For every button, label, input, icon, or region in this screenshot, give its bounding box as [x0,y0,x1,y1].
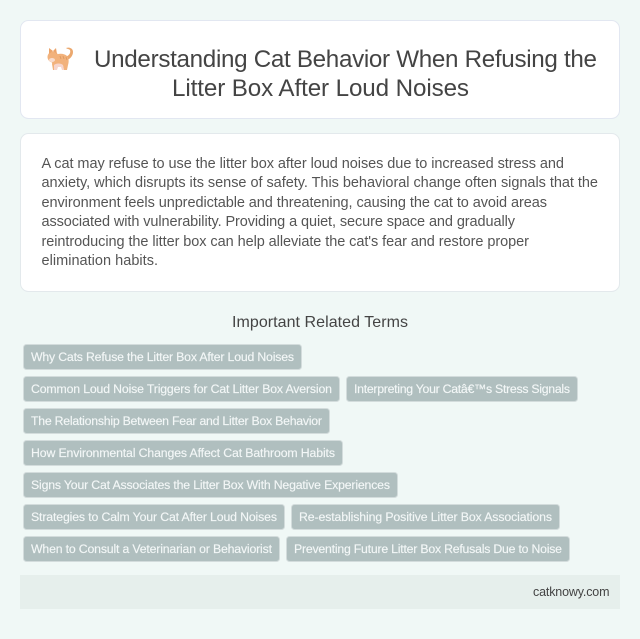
icon: orange cat [48,48,73,70]
chip [286,536,570,562]
chip: How Environmental Changes Affect Cat Bathroom Habits [31,446,335,460]
chip [24,376,340,402]
chip [24,472,398,498]
chip: Signs Your Cat Associates the Litter Box With Negative Experiences [31,478,390,492]
chip: Why Cats Refuse the Litter Box After Loud Noises [31,350,294,364]
chip [24,440,342,466]
chip: Interpreting Your Catâ€™s Stress Signals [354,382,570,396]
text block: description: A cat may refuse to use the litter box after loud noises due to increased stress and [42,156,564,172]
chip: When to Consult a Veterinarian or Behaviorist [31,542,273,556]
text block: description: environment feels unpredictable and threatening, causing the cat to avoid areas [42,195,547,211]
chip [24,344,302,370]
chip [346,376,578,402]
heading: related terms: Important Related Terms [232,314,408,331]
panel: description card [20,134,620,292]
chip [24,536,280,562]
panel: related term chips [24,344,578,562]
chip: Preventing Future Litter Box Refusals Due to Noise [294,542,562,556]
chip: Strategies to Calm Your Cat After Loud Noises [31,510,277,524]
chip: Common Loud Noise Triggers for Cat Litter Box Aversion [31,382,332,396]
footer: catknowy.com [533,585,610,599]
text block: description: associated with vulnerability. Providing a quiet, secure space and gradually [42,214,516,230]
panel: title card [20,20,620,118]
chip [24,408,330,434]
text block: description [42,156,598,269]
chip: Re-establishing Positive Litter Box Associations [299,510,552,524]
chip [292,504,560,530]
text block: description: anxiety, which disrupts its sense of safety. This behavioral change often signals that the [42,175,598,191]
text block: description: elimination habits. [42,253,158,269]
chip: The Relationship Between Fear and Litter Box Behavior [31,414,322,428]
title: Litter Box After Loud Noises [172,75,469,102]
title [94,46,597,102]
text block: description: reintroducing the litter box can help alleviate the cat's fear and restore proper [42,234,529,250]
chip [24,504,284,530]
footer [20,575,620,609]
title: Understanding Cat Behavior When Refusing the [94,46,597,73]
